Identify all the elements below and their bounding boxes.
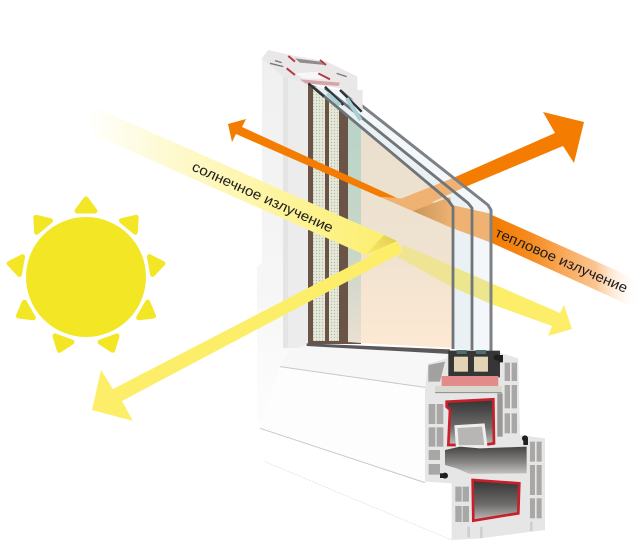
black gaskets [440,355,528,479]
bottom feet [467,522,533,538]
refracted solar arrow to lower left (yellow) [92,235,403,421]
reflected heat radiation arrow (orange) [228,119,640,310]
inner bead piece [456,425,486,447]
glazing unit edge with pink seal [435,350,502,393]
glass panes [312,86,491,351]
top cut section of the frame [262,50,363,120]
PVC profile cross-section [425,350,545,540]
window sill and bottom profile [260,343,545,540]
middle horizontal chamber [445,447,527,474]
solar radiation band [85,103,403,255]
glass edge lines [312,86,491,351]
label: solar radiation: солнечное излучение [190,158,336,236]
window frame: left profile face [257,58,308,428]
label: heat radiation: тепловое излучение [493,224,631,296]
window interior: spacer strips and glass tint [308,83,452,348]
icon: sun [8,199,164,353]
transmitted heat arrow going up right (orange) [395,112,584,228]
lower reinforcement chamber, red [473,480,519,521]
sill white faces [260,343,452,540]
transmitted solar arrow (yellow) [398,245,572,336]
upper reinforcement chamber, red [447,399,494,445]
